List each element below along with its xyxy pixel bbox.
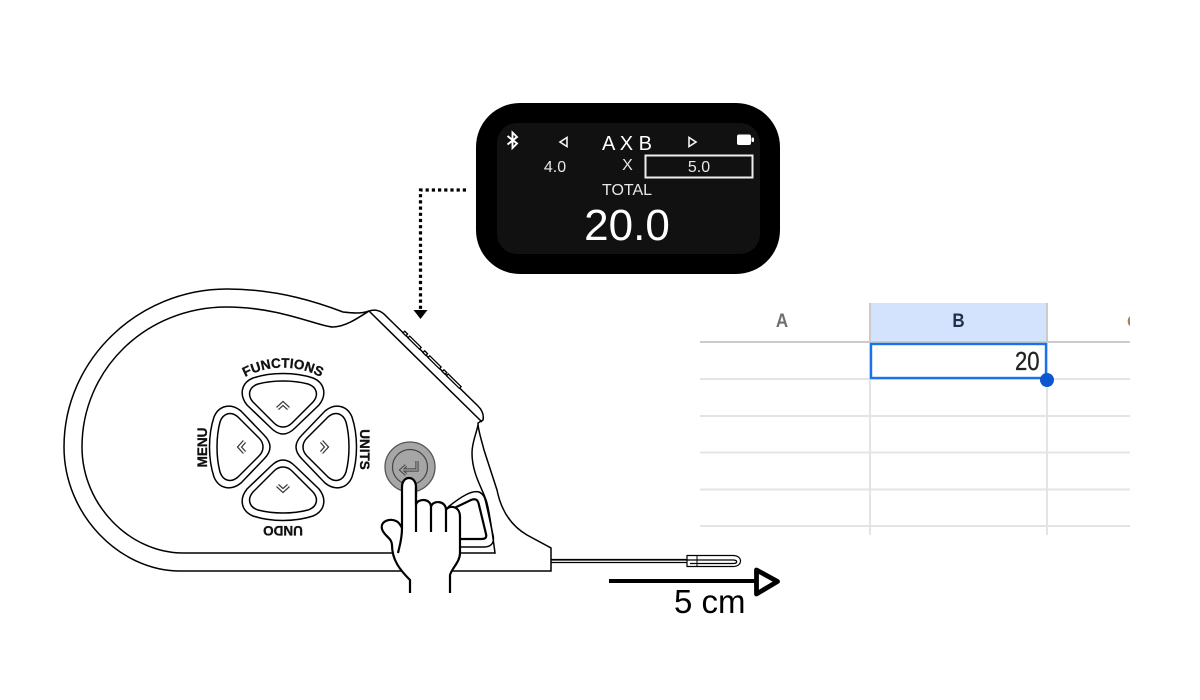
lever lock (448, 492, 493, 547)
icon: right triangle (689, 138, 696, 146)
enter button (385, 442, 435, 492)
total value: 20.0 (584, 201, 670, 250)
cell value: 20 (1015, 348, 1040, 376)
column header A: A (776, 310, 788, 331)
icon: battery (737, 134, 754, 145)
button: up (242, 374, 324, 434)
button: left (210, 406, 270, 488)
label: functions: FUNCTIONS (242, 358, 324, 377)
value B: 5.0 (688, 159, 710, 176)
button: down (242, 460, 324, 520)
icon: left triangle (560, 138, 567, 146)
column B header highlight (870, 303, 1047, 342)
selection handle (1040, 373, 1054, 387)
tape measure device (64, 289, 740, 571)
value B box (646, 156, 752, 178)
icon: bluetooth (508, 132, 517, 148)
display panel (476, 103, 780, 274)
column header B: B (952, 310, 965, 331)
selected cell (871, 344, 1046, 378)
button: right (296, 406, 356, 488)
value A: 4.0 (544, 159, 566, 176)
side buttons strip (403, 331, 461, 388)
hand pressing button (382, 478, 460, 593)
distance label: 5 cm (674, 583, 746, 620)
label: units: UNITS (357, 429, 372, 470)
tape blade (551, 556, 740, 566)
movement arrow (609, 570, 778, 594)
column header C: C (1127, 312, 1139, 331)
spreadsheet (700, 303, 1139, 535)
dotted arrow from display to device (414, 190, 466, 319)
device inner contour (82, 307, 495, 553)
icon: enter arrow (401, 461, 417, 474)
total label: TOTAL (602, 182, 652, 199)
device outer body (64, 289, 551, 571)
label: undo: UNDO (263, 523, 303, 538)
multiply sign: X (622, 157, 633, 174)
top edge line (369, 311, 482, 422)
mode title: A X B (602, 133, 652, 155)
label: menu: MENU (195, 428, 210, 467)
